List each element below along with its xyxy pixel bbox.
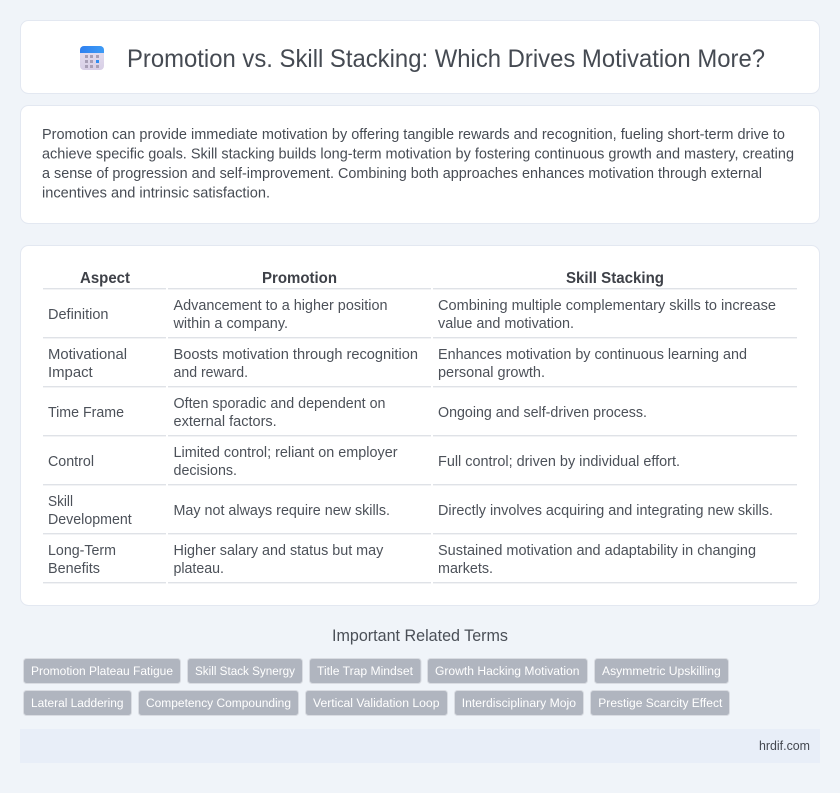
row: long-term benefits: Higher salary and status but may (174, 543, 384, 559)
row: time frame: Time Frame (48, 405, 124, 421)
panel: title header (20, 20, 820, 94)
panel: related term tags: Interdisciplinary Mojo (462, 696, 576, 710)
row: skill development: Development (48, 512, 132, 528)
panel: introduction text: Promotion can provide immediate motivation by offering tangible rewards and recognition, fueling short-term drive to (42, 127, 785, 143)
row: definition: within a company. (172, 316, 288, 332)
panel: related term tags: Vertical Validation Loop (313, 696, 440, 710)
row: skill development: Skill (48, 494, 73, 510)
table header row: Aspect (80, 270, 131, 287)
footer: hrdif.com (759, 738, 810, 753)
row: time frame: Often sporadic and dependent on (174, 396, 386, 412)
footer (20, 729, 820, 763)
panel: related term tags: Asymmetric Upskilling (602, 664, 721, 678)
row: skill development: May not always require new skills. (174, 503, 390, 519)
row: motivational impact: Enhances motivation by continuous learning and (438, 347, 747, 363)
row: definition: Combining multiple complementary skills to increase (438, 298, 776, 314)
row: definition: value and motivation. (438, 316, 574, 332)
panel: comparison table (20, 246, 820, 606)
row: skill development (48, 494, 773, 528)
row: long-term benefits: plateau. (174, 561, 224, 577)
row: control: decisions. (174, 463, 237, 479)
row: motivational impact: and reward. (174, 365, 248, 381)
row: definition: Definition (48, 307, 108, 323)
row: time frame: Ongoing and self-driven process. (438, 405, 647, 421)
row: long-term benefits: Benefits (48, 561, 100, 577)
panel: related term tags: Skill Stack Synergy (195, 664, 296, 678)
icon: calendar (80, 46, 104, 70)
table header row (80, 270, 664, 287)
row: long-term benefits: markets. (438, 561, 493, 577)
heading: important related terms: Important Related Terms (332, 627, 508, 645)
row: control (48, 445, 680, 479)
panel: introduction text: incentives and intrinsic satisfaction. (42, 186, 270, 202)
panel: related term tags: Lateral Laddering (31, 696, 124, 710)
row: definition: Advancement to a higher position (174, 298, 388, 314)
row: motivational impact: Boosts motivation through recognition (174, 347, 418, 363)
row: skill development: Directly involves acquiring and integrating new skills. (438, 503, 773, 519)
table header row: Skill Stacking (566, 270, 664, 287)
panel: introduction text: achieve specific goals. Skill stacking builds long-term motivation by fostering continuous growth and mastery, creating (42, 146, 794, 162)
row: time frame: external factors. (174, 414, 277, 430)
panel: related term tags: Promotion Plateau Fatigue (31, 664, 173, 678)
panel: related term tags (24, 658, 730, 716)
panel: introduction text: a sense of progression and self-improvement. Combining both approaches enhances motivation through external (42, 166, 762, 182)
row: motivational impact: Motivational (48, 347, 127, 363)
panel: introduction text (20, 106, 820, 224)
row: control: Limited control; reliant on employer (174, 445, 398, 461)
row: motivational impact (48, 347, 747, 381)
row: control: Control (48, 454, 94, 470)
row: time frame (48, 396, 647, 430)
panel: related term tags: Title Trap Mindset (317, 664, 414, 678)
panel: related term tags: Competency Compounding (146, 696, 291, 710)
row: definition (48, 298, 776, 332)
panel: related term tags: Prestige Scarcity Effect (598, 696, 723, 710)
table header row: Promotion (262, 270, 337, 287)
row: motivational impact: personal growth. (438, 365, 545, 381)
row: long-term benefits: Long-Term (48, 543, 116, 559)
row: motivational impact: Impact (48, 365, 93, 381)
title: Promotion vs. Skill Stacking: Which Drives Motivation More? (127, 46, 765, 73)
panel: related term tags: Growth Hacking Motivation (435, 664, 580, 678)
row: long-term benefits: Sustained motivation and adaptability in changing (438, 543, 756, 559)
row: control: Full control; driven by individual effort. (438, 454, 680, 470)
row: long-term benefits (48, 543, 756, 577)
